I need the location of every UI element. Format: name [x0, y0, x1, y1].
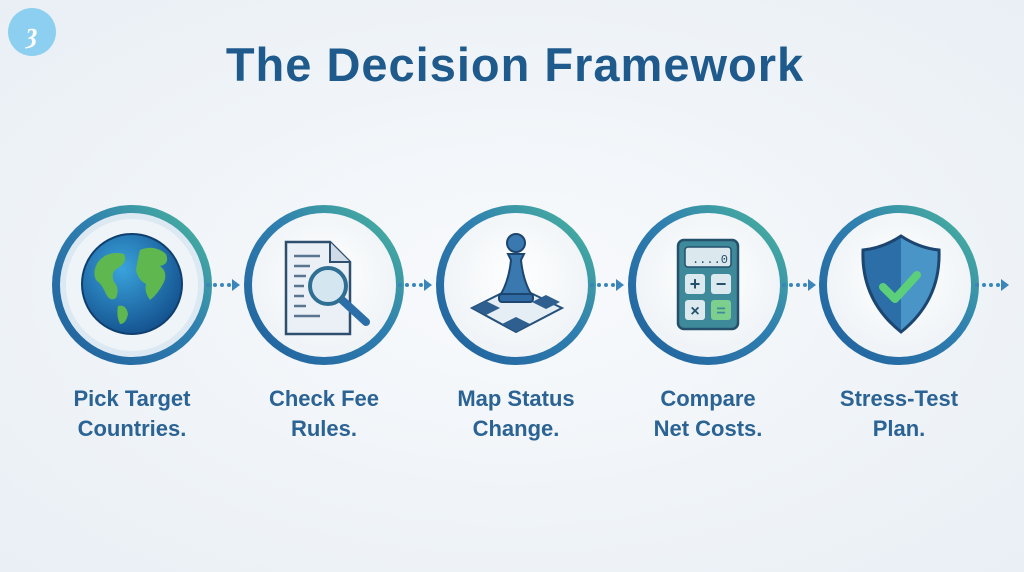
label: Pick Target: [74, 386, 191, 411]
step 3: chess: [436, 205, 596, 441]
icon: calculator: +: [690, 274, 700, 294]
icon: calculator: ×: [690, 303, 700, 320]
arrow 2: [398, 279, 432, 291]
step 2: document: [244, 205, 404, 441]
arrow 4: [782, 279, 816, 291]
icon: shield with check: [863, 236, 939, 332]
step 2: document: Rules.: [291, 416, 357, 441]
label: Compare: [660, 386, 756, 411]
icon: document with magnifier: [286, 242, 366, 334]
step 5: shield: Plan.: [873, 416, 925, 441]
label: Map Status: [457, 386, 575, 411]
icon: calculator: =: [716, 303, 726, 320]
step 4: calculator: Net Costs.: [654, 416, 762, 441]
icon: calculator: [678, 240, 738, 329]
arrow 5: [975, 279, 1009, 291]
icon: globe: [82, 234, 182, 334]
label: Check Fee: [269, 386, 379, 411]
icon: calculator: −: [716, 274, 726, 294]
step 5: shield: [819, 205, 979, 441]
icon: calculator: ....0: [692, 253, 728, 267]
step 3: chess: Change.: [473, 416, 559, 441]
label: Stress-Test: [840, 386, 959, 411]
icon: logo: [8, 8, 56, 56]
icon: logo: ȝ: [25, 18, 38, 49]
step 1: globe: Countries.: [78, 416, 186, 441]
step 4: calculator: [628, 205, 788, 441]
arrow 3: [590, 279, 624, 291]
icon: pawn on board: [472, 234, 562, 332]
step 1: globe: [52, 205, 212, 441]
arrow 1: [206, 279, 240, 291]
title: The Decision Framework: [226, 38, 804, 91]
